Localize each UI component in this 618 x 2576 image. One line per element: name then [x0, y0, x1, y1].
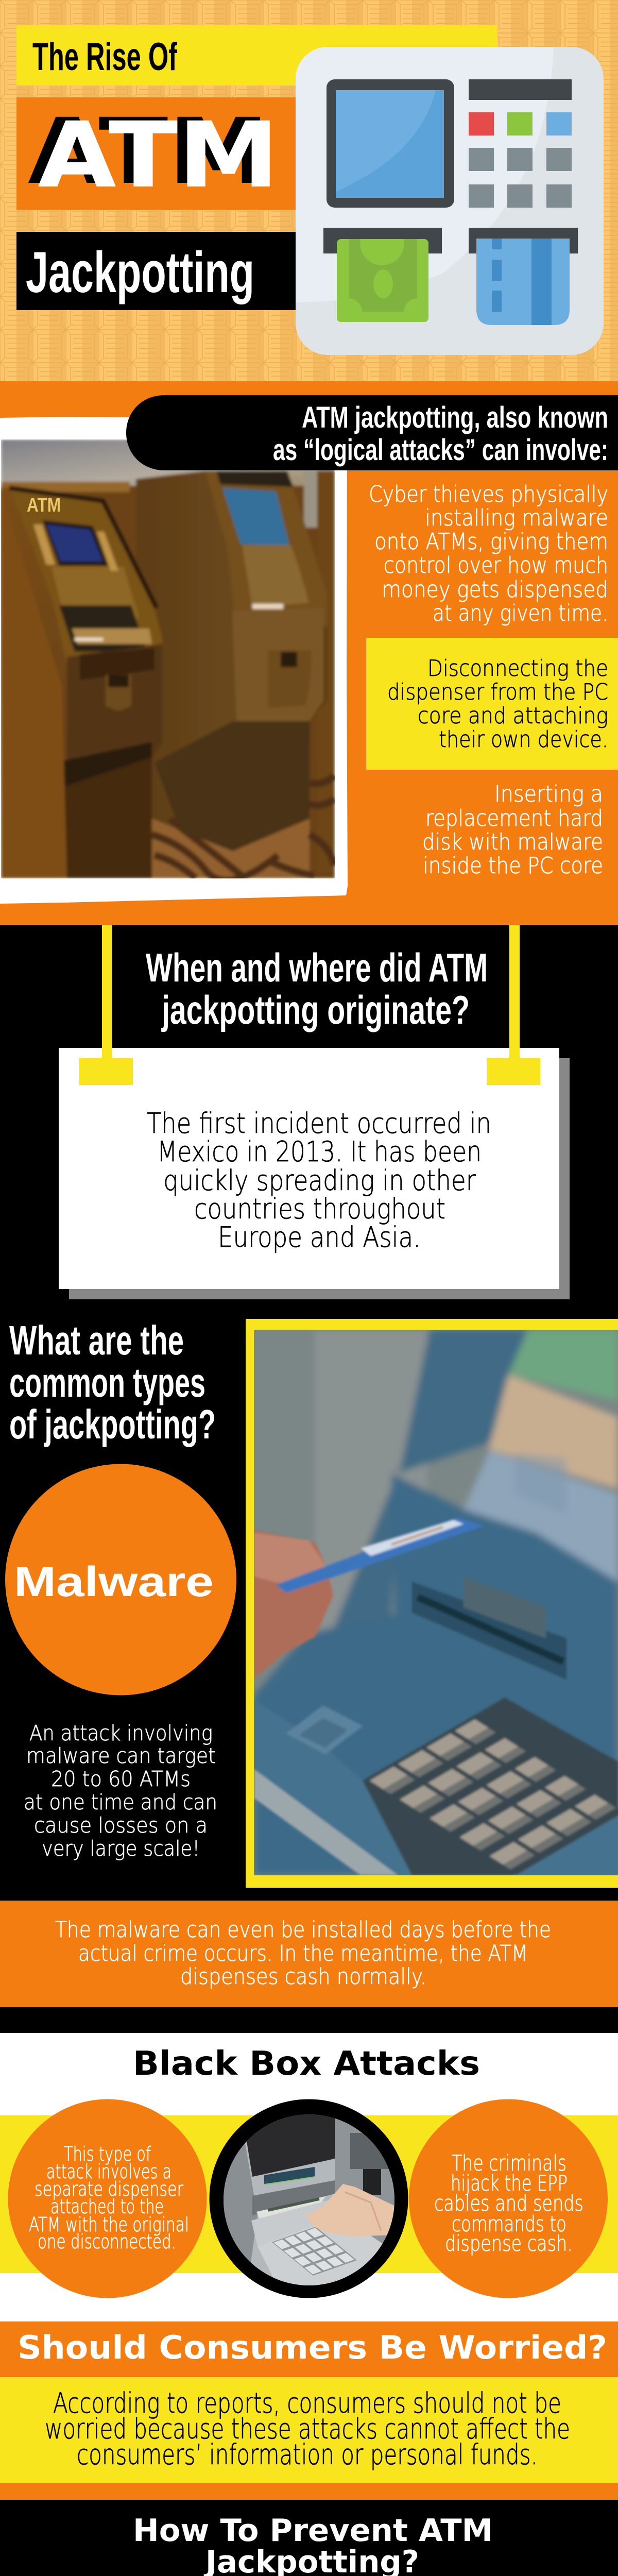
hanging card: first incident — [59, 925, 570, 1299]
heading: common types of jackpotting: What are the — [9, 1317, 184, 1363]
banner: malware installed days before: dispenses cash normally. — [180, 1964, 426, 1990]
hanging card: first incident: countries throughout — [194, 1193, 445, 1225]
photo: ATM machines with white frame: ATM — [27, 495, 61, 516]
circle: EPP cables: The criminals — [452, 2150, 566, 2176]
heading: when and where: jackpotting originate? — [161, 987, 470, 1032]
text block: attack involving malware: malware can target — [26, 1743, 216, 1768]
header panel: brick background — [0, 0, 618, 382]
circle: Malware — [5, 1464, 236, 1695]
panel: Should Consumers Be Worried — [0, 2321, 618, 2500]
hanging card: first incident: The first incident occurred in — [147, 1107, 491, 1140]
hanging card: first incident: Mexico in 2013. It has been — [157, 1136, 482, 1168]
title: The Rise Of ATM Jackpotting: ATM — [38, 103, 279, 208]
circle: EPP cables: commands to — [452, 2211, 566, 2236]
banner: malware installed days before: The malware can even be installed days before the — [55, 1917, 551, 1943]
circle: EPP cables — [409, 2099, 608, 2298]
circle photo: hand taking cash from ATM — [209, 2099, 408, 2298]
banner: malware installed days before: actual crime occurs. In the meantime, the ATM — [78, 1941, 528, 1967]
circle: EPP cables: dispense cash. — [445, 2231, 573, 2256]
text block: cyber thieves — [369, 481, 608, 626]
banner: malware installed days before — [0, 1901, 618, 2007]
heading: How To Prevent ATM Jackpotting: How To Prevent ATM — [133, 2513, 493, 2549]
heading: Should Consumers Be Worried: Should Consumers Be Worried? — [18, 2329, 607, 2366]
text block: attack involving malware: 20 to 60 ATMs — [51, 1767, 191, 1791]
text block: according to reports — [45, 2387, 570, 2471]
hanging card: first incident: quickly spreading in other — [163, 1164, 476, 1197]
title: The Rise Of ATM Jackpotting: Jackpotting — [26, 240, 254, 304]
photo: hand with card at ATM keypad — [246, 1319, 618, 1888]
text block: attack involving malware: at one time and can — [24, 1790, 217, 1815]
heading: common types of jackpotting: common types — [9, 1360, 205, 1405]
heading: when and where: When and where did ATM — [146, 945, 488, 990]
panel: logical attacks — [0, 381, 618, 925]
circle: separate dispenser — [8, 2099, 207, 2298]
panel: How To Prevent — [0, 2500, 618, 2576]
heading: Black Box Attacks: Black Box Attacks — [133, 2045, 480, 2083]
text block: replacement hard disk — [422, 781, 603, 879]
circle: Malware: Malware — [14, 1558, 214, 1605]
callout: disconnecting the dispenser — [366, 638, 618, 770]
title: The Rise Of ATM Jackpotting: ATM — [28, 99, 269, 205]
hanging card: first incident: Europe and Asia. — [218, 1221, 421, 1253]
heading: when and where — [146, 945, 488, 1032]
circle: separate dispenser: attached to the — [50, 2195, 164, 2218]
circle: separate dispenser: This type of — [64, 2143, 151, 2165]
circle: EPP cables: hijack the EPP — [451, 2171, 568, 2196]
text block: attack involving malware: very large scale! — [42, 1836, 200, 1861]
title: The Rise Of ATM Jackpotting — [16, 25, 497, 310]
circle: separate dispenser: attack involves a — [46, 2160, 171, 2183]
heading: How To Prevent ATM Jackpotting — [133, 2513, 493, 2576]
photo: ATM machines with white frame — [0, 417, 348, 904]
panel: black background, origin and types — [0, 925, 618, 2033]
text block: replacement hard disk: Inserting a — [494, 781, 603, 807]
heading: common types of jackpotting — [9, 1317, 216, 1447]
circle: separate dispenser: one disconnected. — [38, 2230, 176, 2253]
text block: attack involving malware: cause losses on a — [34, 1813, 208, 1838]
circle: separate dispenser: separate dispenser — [35, 2178, 183, 2200]
heading: common types of jackpotting: of jackpotting? — [9, 1401, 216, 1447]
heading bar: ATM jackpotting also known as logical attacks — [126, 395, 618, 470]
panel: Black Box Attacks — [0, 2049, 618, 2298]
icon: ATM machine illustration — [296, 47, 604, 355]
text block: attack involving malware — [24, 1721, 217, 1861]
title: The Rise Of ATM Jackpotting: The Rise Of — [32, 35, 177, 79]
circle: separate dispenser: ATM with the original — [29, 2213, 189, 2236]
circle: EPP cables: cables and sends — [434, 2191, 583, 2216]
text block: attack involving malware: An attack involving — [29, 1721, 213, 1745]
